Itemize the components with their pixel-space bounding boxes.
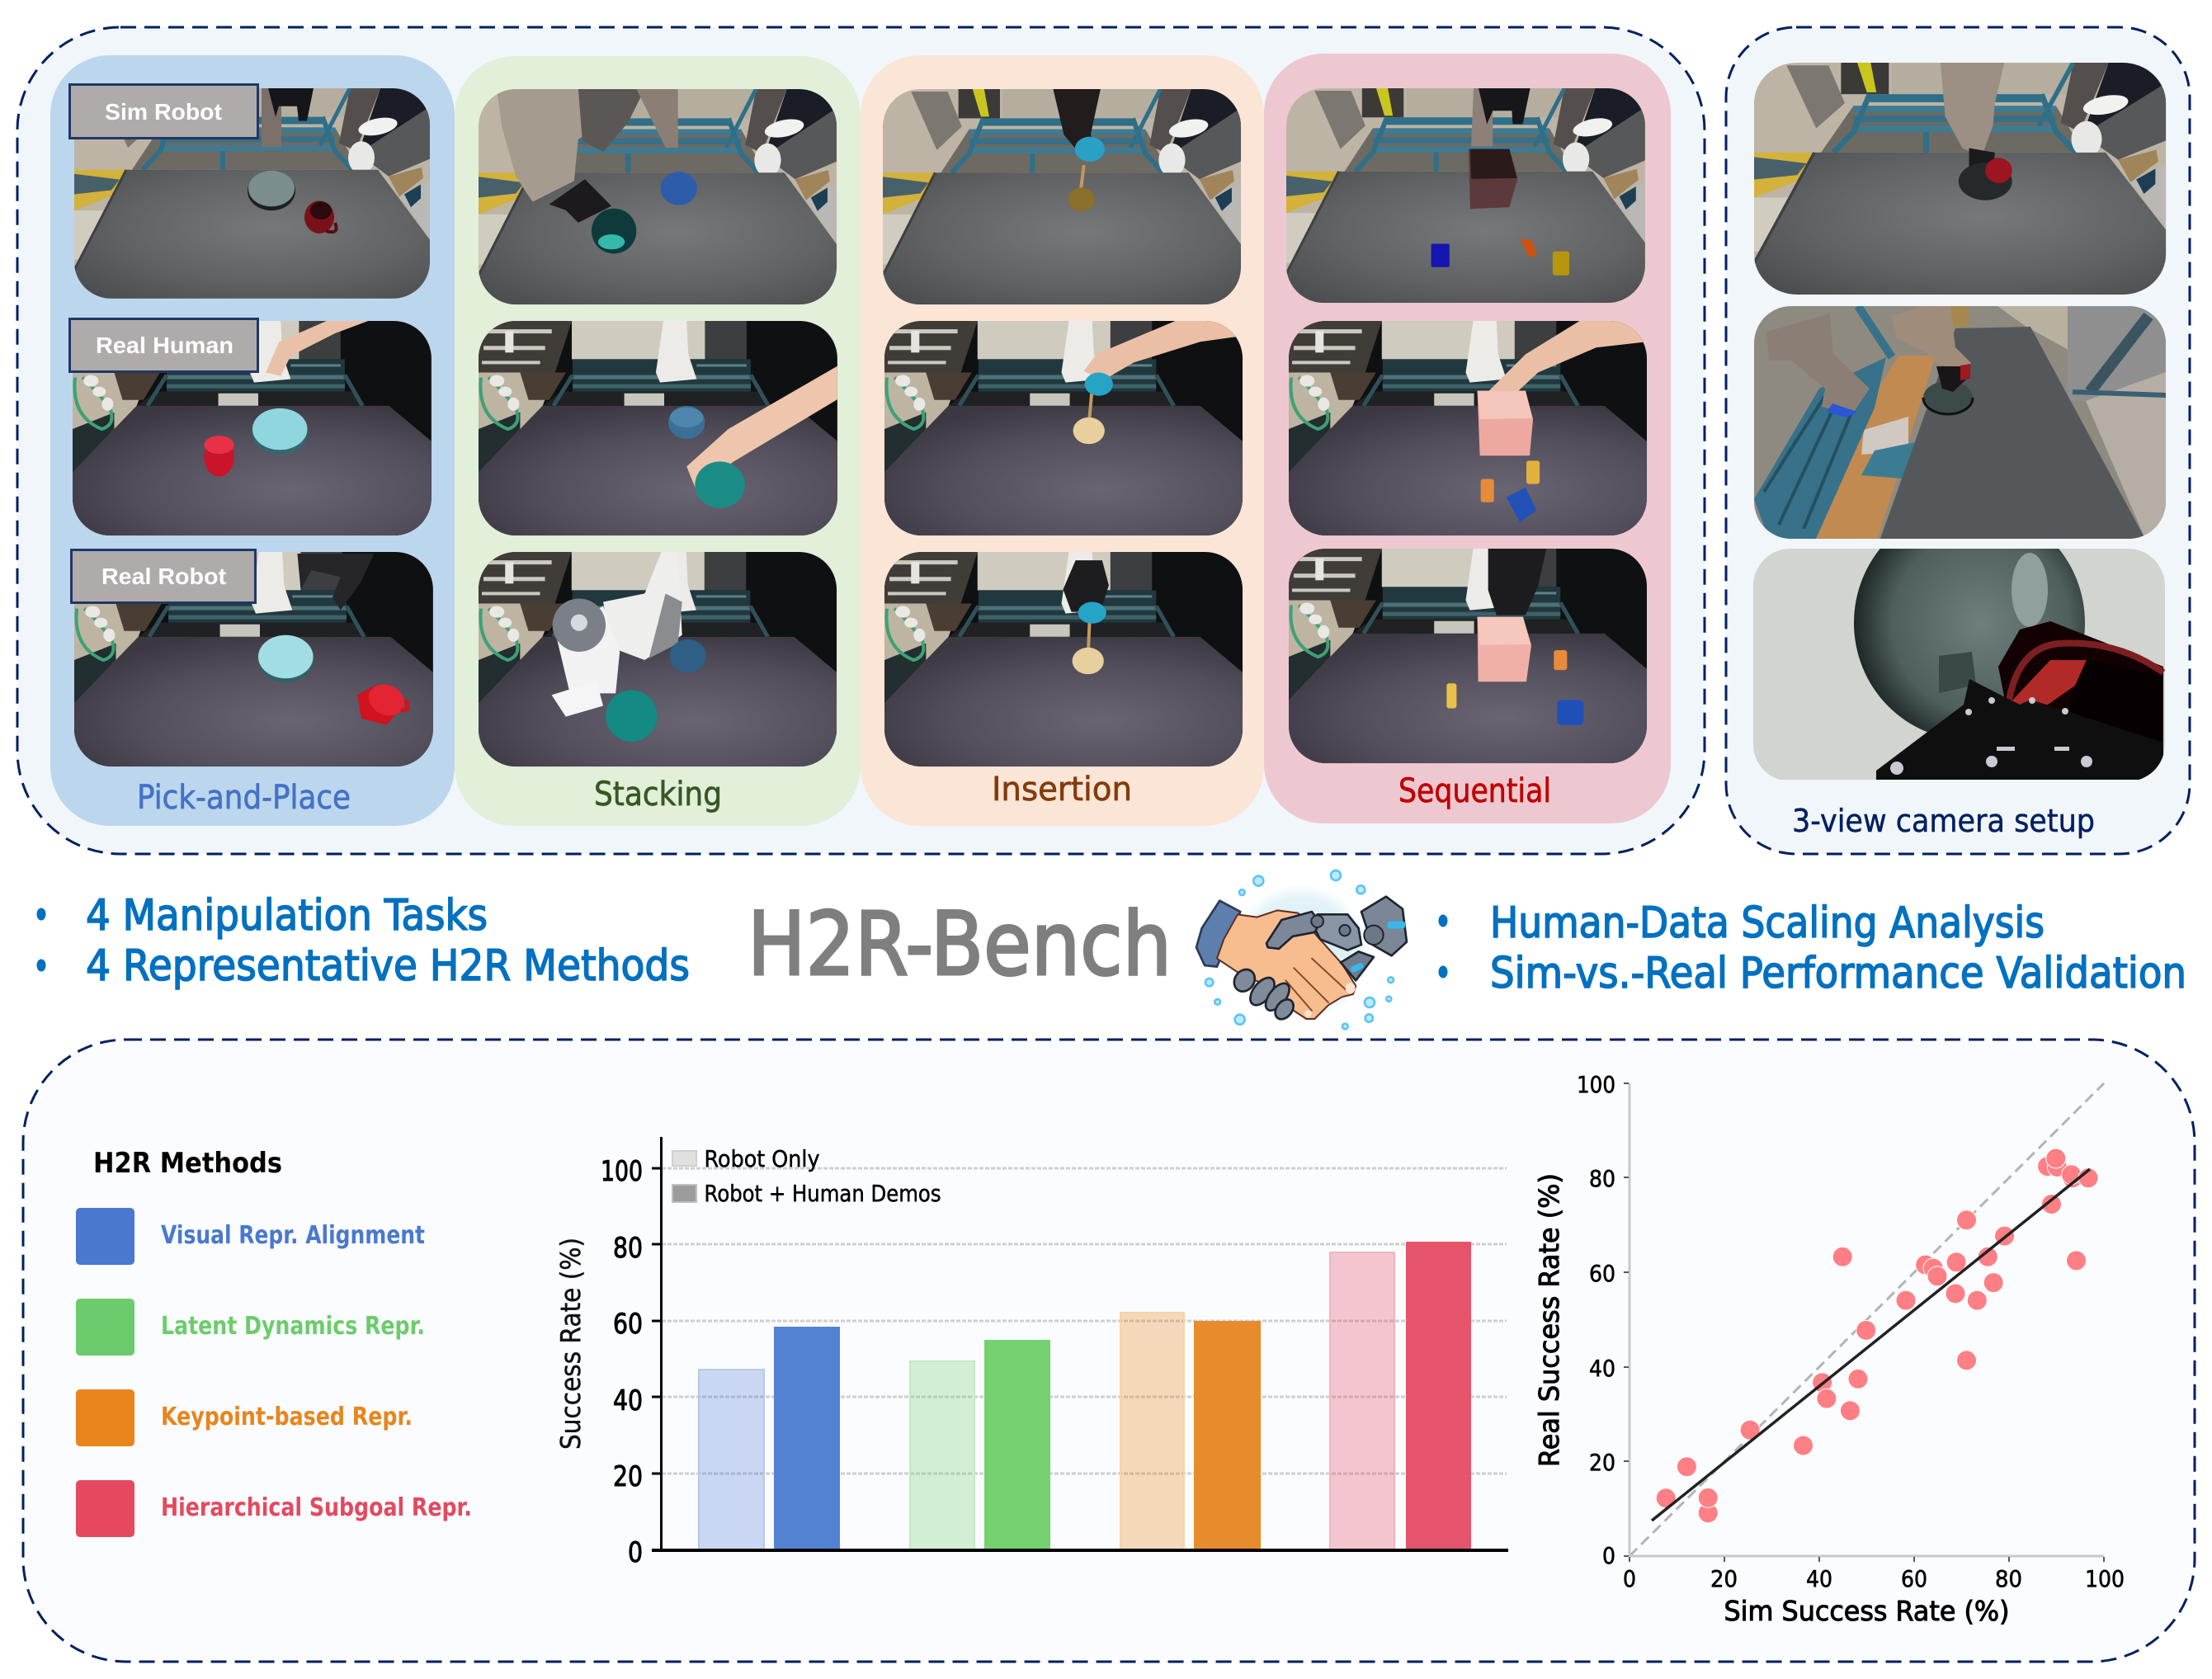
panel: pick-and-place (50, 55, 455, 826)
y tick labels: 80 (613, 1232, 643, 1265)
bullets: left: 4 Manipulation Tasks (86, 891, 488, 941)
caption: insertion: Insertion (992, 771, 1132, 809)
y tick labels: 60 (613, 1308, 643, 1341)
bar legend: robot only: Robot Only (705, 1145, 820, 1172)
label: real human (69, 318, 257, 371)
x axis (652, 1549, 1508, 1552)
legend item: visual repr. alignment (76, 1208, 425, 1265)
scatter y tick labels: 60 (1589, 1260, 1615, 1287)
y axis (652, 1137, 662, 1551)
image: real human bowls (479, 321, 841, 535)
legend item: keypoint-based repr.: Keypoint-based Repr. (161, 1403, 413, 1431)
scatter tick marks (1624, 1083, 2104, 1562)
scatter y tick labels (1577, 1071, 1615, 1569)
icon: human and robot handshake (1196, 870, 1407, 1029)
label: real robot: Real Robot (101, 564, 226, 589)
scatter x tick labels: 20 (1710, 1565, 1738, 1592)
caption: stacking: Stacking (594, 776, 722, 814)
bars: keypoint-based (1120, 1313, 1261, 1550)
scatter axes (1630, 1083, 2104, 1556)
bars: latent dynamics (910, 1340, 1050, 1550)
bar legend: robot + human demos: Robot + Human Demos (705, 1180, 941, 1207)
scatter x axis title: Sim Success Rate (%) (1724, 1595, 2010, 1627)
panel: insertion (861, 55, 1264, 826)
image: sim robot bowls (479, 89, 840, 304)
scatter x tick labels: 40 (1806, 1565, 1832, 1592)
bullets: right: Human-Data Scaling Analysis (1490, 898, 2045, 948)
image: real human sequential (1289, 321, 1650, 535)
image: real robot insertion (884, 552, 1246, 766)
caption: 3-view camera setup: 3-view camera setup (1792, 803, 2095, 839)
bars: visual repr. (699, 1327, 840, 1550)
y tick labels (601, 1155, 643, 1569)
panel: task scenes container (17, 27, 1705, 854)
image: camera view side (1754, 306, 2166, 539)
legend: H2R methods (76, 1147, 472, 1537)
y axis title: Success Rate (%) (554, 1238, 587, 1450)
legend item: keypoint-based repr. (76, 1389, 413, 1446)
regression line (1652, 1169, 2090, 1521)
legend item: latent dynamics repr. (76, 1299, 425, 1356)
panel: stacking (455, 56, 861, 826)
scatter x tick labels: 100 (2085, 1565, 2125, 1592)
scatter points (1656, 1148, 2098, 1523)
panel: results (23, 1040, 2195, 1662)
y tick labels: 100 (601, 1155, 643, 1188)
image: real robot bowls (479, 552, 840, 766)
scatter x tick labels (1623, 1565, 2125, 1592)
caption: sequential: Sequential (1398, 772, 1551, 810)
scatter x tick labels: 60 (1901, 1565, 1927, 1592)
y tick labels: 0 (628, 1536, 643, 1569)
image: camera view front (1754, 63, 2170, 295)
y tick labels: 40 (613, 1384, 643, 1417)
label: sim robot: Sim Robot (105, 99, 222, 125)
bar chart: success rate (554, 1137, 1508, 1569)
caption: pick-and-place: Pick-and-Place (137, 779, 351, 817)
panel: 3-view camera setup (1726, 27, 2190, 854)
label: real robot (71, 549, 256, 602)
bars: hierarchical subgoal (1330, 1242, 1471, 1550)
bullets: left (37, 891, 690, 991)
label: sim robot (69, 84, 257, 139)
legend heading: H2R Methods (93, 1147, 282, 1180)
identity line (1630, 1083, 2104, 1556)
scatter x tick labels: 80 (1995, 1565, 2022, 1592)
image: camera view wrist (1753, 549, 2165, 780)
image: sim robot insertion (883, 89, 1244, 304)
panel: sequential (1264, 54, 1671, 823)
image: sim robot plate and mug (74, 88, 433, 299)
scatter y axis title: Real Success Rate (%) (1533, 1173, 1565, 1467)
scatter y tick labels: 40 (1589, 1355, 1615, 1382)
title: H2R-Bench (748, 894, 1172, 995)
scatter chart: sim vs real (1533, 1071, 2125, 1627)
label: real human: Real Human (96, 332, 233, 358)
image: sim robot sequential (1286, 88, 1648, 303)
scatter y tick labels: 80 (1589, 1165, 1615, 1192)
bullets: right (1439, 898, 2186, 998)
y tick labels: 20 (613, 1460, 643, 1493)
image: real robot sequential (1289, 549, 1650, 763)
image: real robot plate and mug (74, 552, 436, 766)
legend item: hierarchical subgoal repr.: Hierarchical Subgoal Repr. (161, 1493, 472, 1522)
legend item: latent dynamics repr.: Latent Dynamics Repr. (161, 1312, 425, 1341)
legend item: hierarchical subgoal repr. (76, 1480, 472, 1537)
bullets: left: 4 Representative H2R Methods (86, 941, 690, 991)
scatter y tick labels: 100 (1577, 1071, 1615, 1098)
scatter y tick labels: 0 (1602, 1542, 1615, 1569)
scatter x tick labels: 0 (1623, 1565, 1636, 1592)
legend item: visual repr. alignment: Visual Repr. Alignment (161, 1221, 425, 1250)
image: real human plate and cup (73, 321, 435, 535)
image: real human insertion (884, 321, 1246, 535)
scatter y tick labels: 20 (1589, 1449, 1615, 1476)
